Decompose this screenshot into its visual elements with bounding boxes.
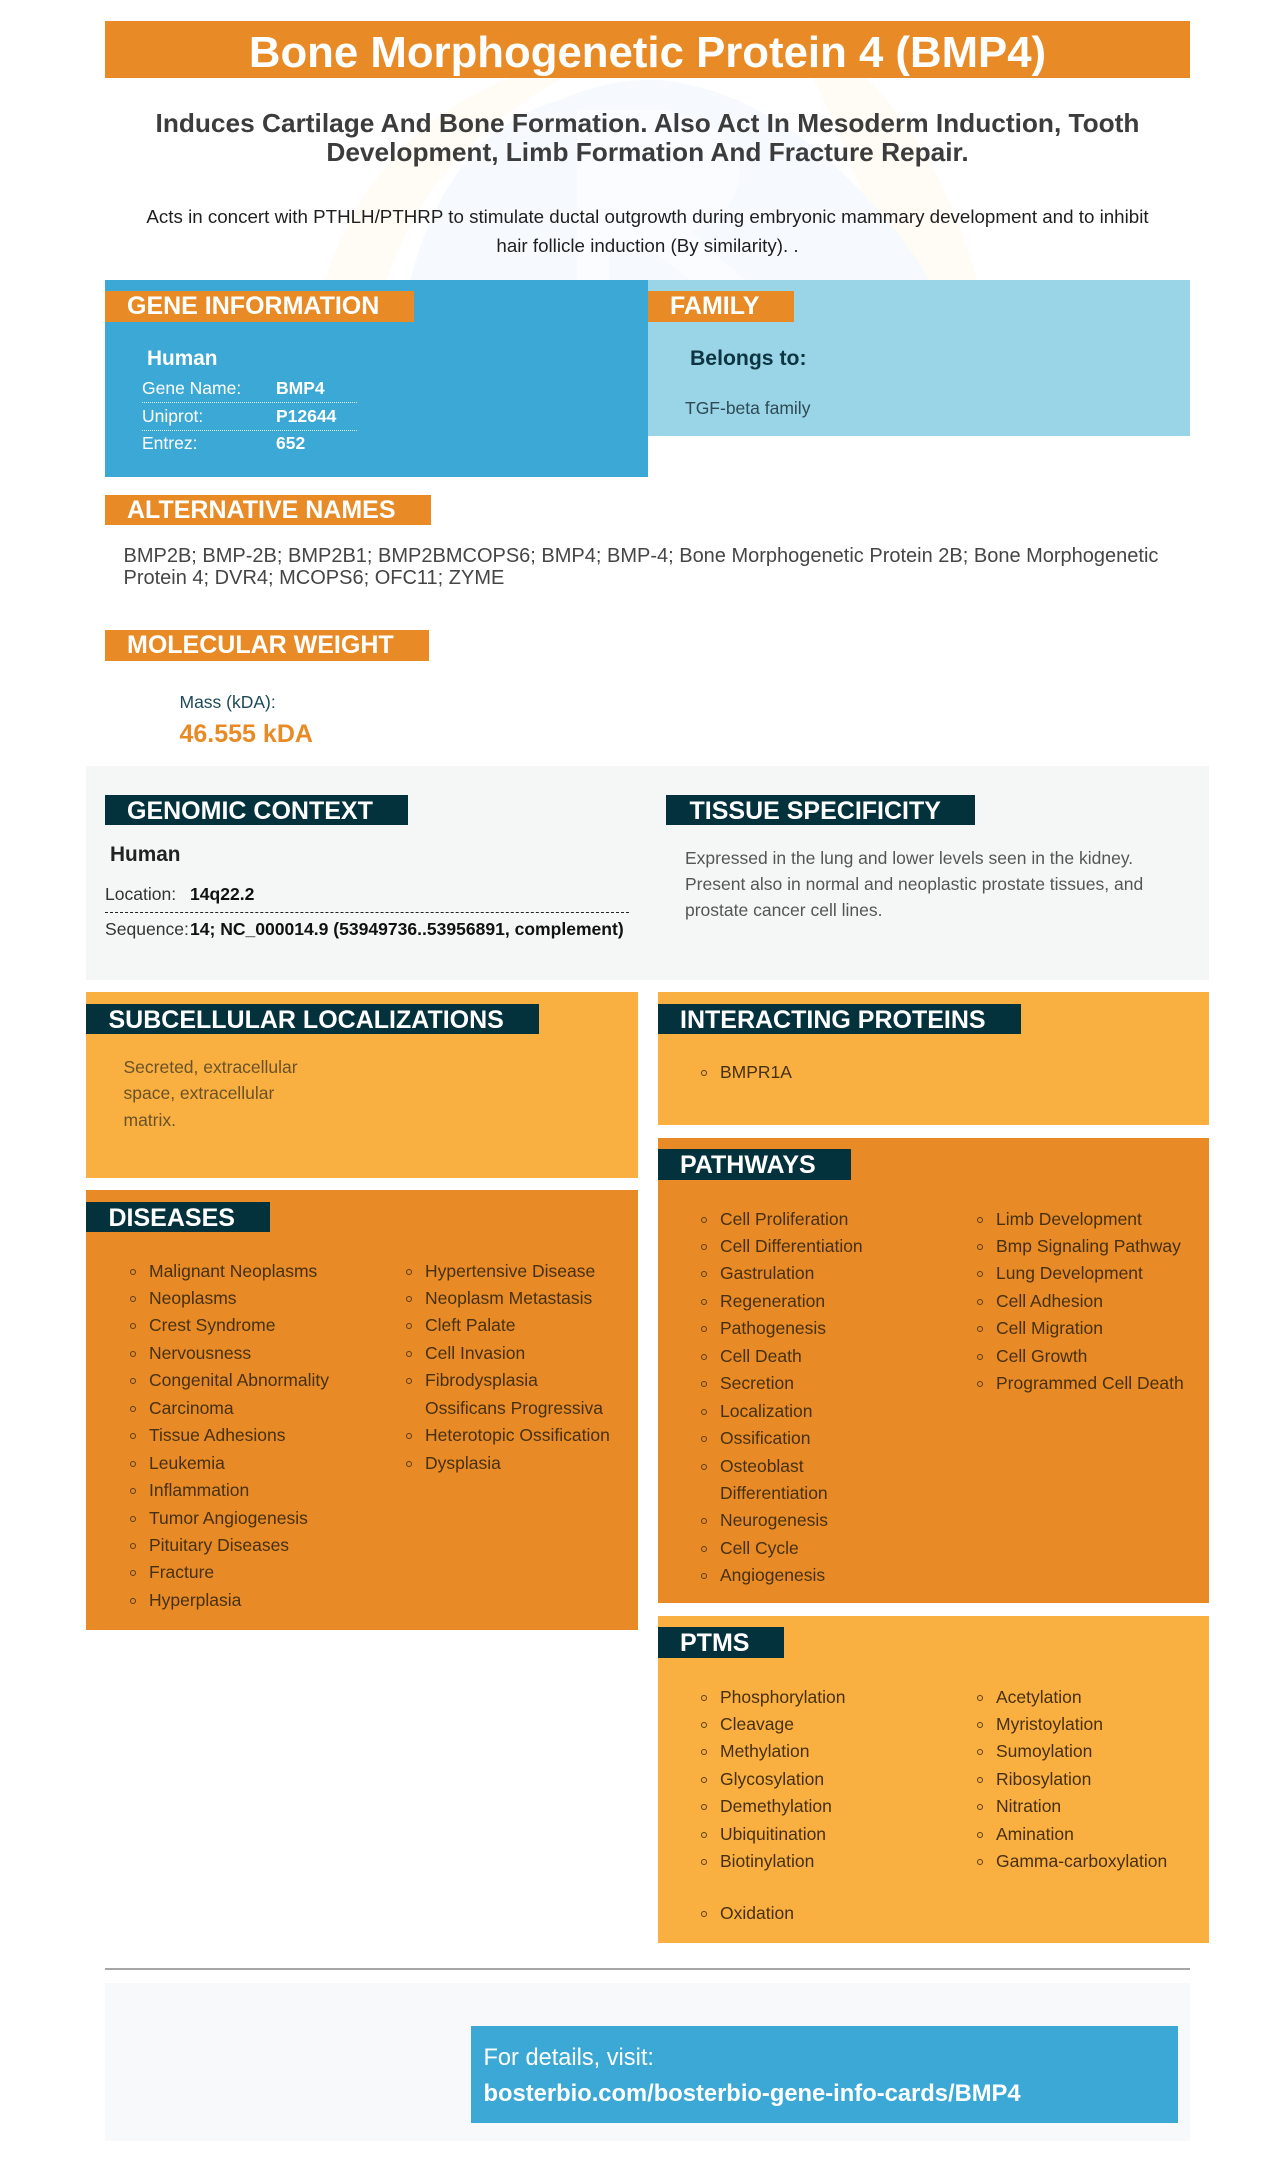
heading: alternative names: ALTERNATIVE NAMES — [127, 496, 396, 524]
diseases list column 1: Tumor Angiogenesis — [149, 1508, 308, 1528]
species label: Human — [147, 346, 217, 370]
heading: subcellular localizations: SUBCELLULAR LOCALIZATIONS — [108, 1006, 504, 1034]
panel: gene information — [105, 280, 648, 477]
tissue specificity text — [685, 848, 1143, 920]
subcellular text: space, extracellular — [124, 1083, 274, 1103]
diseases list column 1: Fracture — [149, 1562, 214, 1582]
panel: interacting proteins — [658, 992, 1209, 1125]
ptms list column 1: Cleavage — [720, 1714, 794, 1734]
diseases list column 2: Ossificans Progressiva — [425, 1398, 603, 1418]
pathways list column 1: Differentiation — [720, 1483, 828, 1503]
interacting proteins list: BMPR1A — [720, 1062, 792, 1082]
diseases list column 2: Neoplasm Metastasis — [425, 1288, 592, 1308]
panel: diseases — [86, 1190, 638, 1630]
diseases list column 1: Crest Syndrome — [149, 1315, 275, 1335]
panel: family — [648, 280, 1190, 436]
ptms list column 2: Myristoylation — [996, 1714, 1103, 1734]
pathways list column 1: Regeneration — [720, 1291, 825, 1311]
title: Bone Morphogenetic Protein 4 (BMP4) — [249, 28, 1046, 77]
pathways list column 1 — [701, 1208, 863, 1585]
entrez row: Entrez: — [142, 433, 197, 453]
pathways list column 2: Programmed Cell Death — [996, 1373, 1184, 1393]
entrez row — [142, 433, 305, 453]
subtitle: Induces Cartilage And Bone Formation. Also Act In Mesoderm Induction, Tooth — [156, 108, 1139, 138]
uniprot row: Uniprot: — [142, 406, 203, 426]
pathways list column 1: Pathogenesis — [720, 1318, 826, 1338]
panel: pathways — [658, 1138, 1209, 1603]
tissue specificity text: prostate cancer cell lines. — [685, 900, 882, 920]
subcellular text: matrix. — [124, 1110, 176, 1130]
sequence row: Sequence: — [105, 919, 189, 939]
pathways list column 2 — [977, 1208, 1184, 1393]
pathways list column 1: Cell Differentiation — [720, 1236, 863, 1256]
callout label: For details, visit: — [484, 2045, 654, 2071]
diseases list column 2: Heterotopic Ossification — [425, 1425, 610, 1445]
ptms list column 1: Ubiquitination — [720, 1824, 826, 1844]
alternative names text: Protein 4; DVR4; MCOPS6; OFC11; ZYME — [124, 567, 504, 589]
callout: details link — [471, 2026, 1178, 2123]
ptms list column 1: Biotinylation — [720, 1851, 814, 1871]
diseases list column 2 — [406, 1260, 610, 1473]
pathways list column 2: Limb Development — [996, 1208, 1142, 1228]
ptms list column 1: Demethylation — [720, 1796, 832, 1816]
heading: interacting proteins: INTERACTING PROTEINS — [680, 1006, 986, 1034]
diseases list column 1: Pituitary Diseases — [149, 1535, 289, 1555]
diseases list column 1 — [130, 1260, 329, 1610]
pathways list column 1: Osteoblast — [720, 1456, 804, 1476]
alternative names text — [124, 545, 1158, 589]
uniprot row — [142, 406, 357, 431]
gene name row: Gene Name: — [142, 378, 241, 398]
ptms list column 1: Phosphorylation — [720, 1686, 846, 1706]
pathways list column 2: Cell Migration — [996, 1318, 1103, 1338]
diseases list column 2: Fibrodysplasia — [425, 1370, 538, 1390]
alternative names text: BMP2B; BMP-2B; BMP2B1; BMP2BMCOPS6; BMP4; BMP-4; Bone Morphogenetic Protein 2B; Bone Morphogenetic — [124, 545, 1158, 567]
diseases list column 1: Inflammation — [149, 1480, 249, 1500]
heading: molecular weight: MOLECULAR WEIGHT — [127, 631, 394, 659]
diseases list column 1: Tissue Adhesions — [149, 1425, 286, 1445]
ptms list column 2: Ribosylation — [996, 1769, 1091, 1789]
panel: genomic context and tissue specificity — [86, 766, 1209, 980]
description: Acts in concert with PTHLH/PTHRP to stimulate ductal outgrowth during embryonic mammary development and to inhibit — [146, 206, 1149, 227]
pathways list column 1: Cell Death — [720, 1346, 802, 1366]
entrez row: 652 — [276, 433, 305, 453]
heading: ptms: PTMS — [680, 1629, 749, 1657]
title — [105, 21, 1190, 78]
subcellular text — [124, 1057, 298, 1130]
subtitle: Development, Limb Formation And Fracture Repair. — [326, 137, 969, 167]
heading: ptms — [658, 1627, 784, 1658]
diseases list column 2: Hypertensive Disease — [425, 1260, 595, 1280]
pathways list column 1: Ossification — [720, 1428, 810, 1448]
diseases list column 1: Malignant Neoplasms — [149, 1260, 317, 1280]
diseases list column 1: Carcinoma — [149, 1398, 234, 1418]
ptms list column 1 — [701, 1686, 846, 1923]
location row: 14q22.2 — [190, 884, 254, 904]
pathways list column 2: Cell Adhesion — [996, 1291, 1103, 1311]
heading: gene information: GENE INFORMATION — [127, 292, 379, 320]
subtitle — [156, 108, 1139, 167]
ptms list column 1: Methylation — [720, 1741, 810, 1761]
panel: ptms — [658, 1616, 1209, 1943]
sequence row: 14; NC_000014.9 (53949736..53956891, complement) — [190, 919, 624, 939]
heading: diseases: DISEASES — [108, 1204, 235, 1232]
background watermark: faint arches — [325, 78, 977, 280]
diseases list column 2: Dysplasia — [425, 1453, 501, 1473]
subcellular text: Secreted, extracellular — [124, 1057, 298, 1077]
pathways list column 1: Cell Proliferation — [720, 1208, 848, 1228]
diseases list column 1: Neoplasms — [149, 1288, 237, 1308]
ptms list column 2: Gamma-carboxylation — [996, 1851, 1167, 1871]
uniprot row: P12644 — [276, 406, 336, 426]
tissue specificity text: Present also in normal and neoplastic prostate tissues, and — [685, 874, 1143, 894]
heading: diseases — [86, 1202, 270, 1232]
diseases list column 1: Hyperplasia — [149, 1590, 241, 1610]
callout url: bosterbio.com/bosterbio-gene-info-cards/BMP4 — [484, 2080, 1021, 2107]
ptms list column 2: Sumoylation — [996, 1741, 1092, 1761]
mass value: 46.555 kDA — [180, 720, 313, 748]
family value: TGF-beta family — [685, 398, 810, 418]
mass label: Mass (kDA): — [180, 692, 276, 712]
pathways list column 1: Angiogenesis — [720, 1565, 825, 1585]
diseases list column 1: Congenital Abnormality — [149, 1370, 329, 1390]
footer panel — [105, 1983, 1190, 2141]
ptms list column 2: Amination — [996, 1824, 1074, 1844]
heading: tissue specificity: TISSUE SPECIFICITY — [690, 797, 941, 825]
belongs to label: Belongs to: — [690, 346, 807, 370]
pathways list column 1: Cell Cycle — [720, 1538, 799, 1558]
pathways list column 2: Lung Development — [996, 1263, 1143, 1283]
ptms list column 2 — [977, 1686, 1167, 1871]
location row — [105, 883, 629, 913]
diseases list column 2: Cell Invasion — [425, 1343, 525, 1363]
pathways list column 1: Secretion — [720, 1373, 794, 1393]
heading: genomic context: GENOMIC CONTEXT — [127, 797, 373, 825]
pathways list column 1: Localization — [720, 1401, 812, 1421]
gene name row — [142, 378, 357, 403]
location row: Location: — [105, 884, 176, 904]
heading: pathways — [658, 1149, 851, 1180]
diseases list column 1: Leukemia — [149, 1453, 225, 1473]
gene name row: BMP4 — [276, 378, 325, 398]
pathways list column 2: Cell Growth — [996, 1346, 1087, 1366]
ptms list column 1: Glycosylation — [720, 1769, 824, 1789]
description: hair follicle induction (By similarity). . — [496, 235, 799, 256]
ptms list column 2: Nitration — [996, 1796, 1061, 1816]
diseases list column 2: Cleft Palate — [425, 1315, 515, 1335]
description — [146, 206, 1149, 256]
ptms list column 1: Oxidation — [720, 1903, 794, 1923]
panel: subcellular localizations — [86, 992, 638, 1178]
species label: Human — [110, 843, 180, 866]
pathways list column 1: Neurogenesis — [720, 1510, 828, 1530]
heading: pathways: PATHWAYS — [680, 1151, 816, 1179]
pathways list column 1: Gastrulation — [720, 1263, 814, 1283]
pathways list column 2: Bmp Signaling Pathway — [996, 1236, 1181, 1256]
diseases list column 1: Nervousness — [149, 1343, 251, 1363]
heading: family — [648, 291, 794, 322]
heading: family: FAMILY — [670, 292, 759, 320]
tissue specificity text: Expressed in the lung and lower levels seen in the kidney. — [685, 848, 1133, 868]
ptms list column 2: Acetylation — [996, 1686, 1082, 1706]
